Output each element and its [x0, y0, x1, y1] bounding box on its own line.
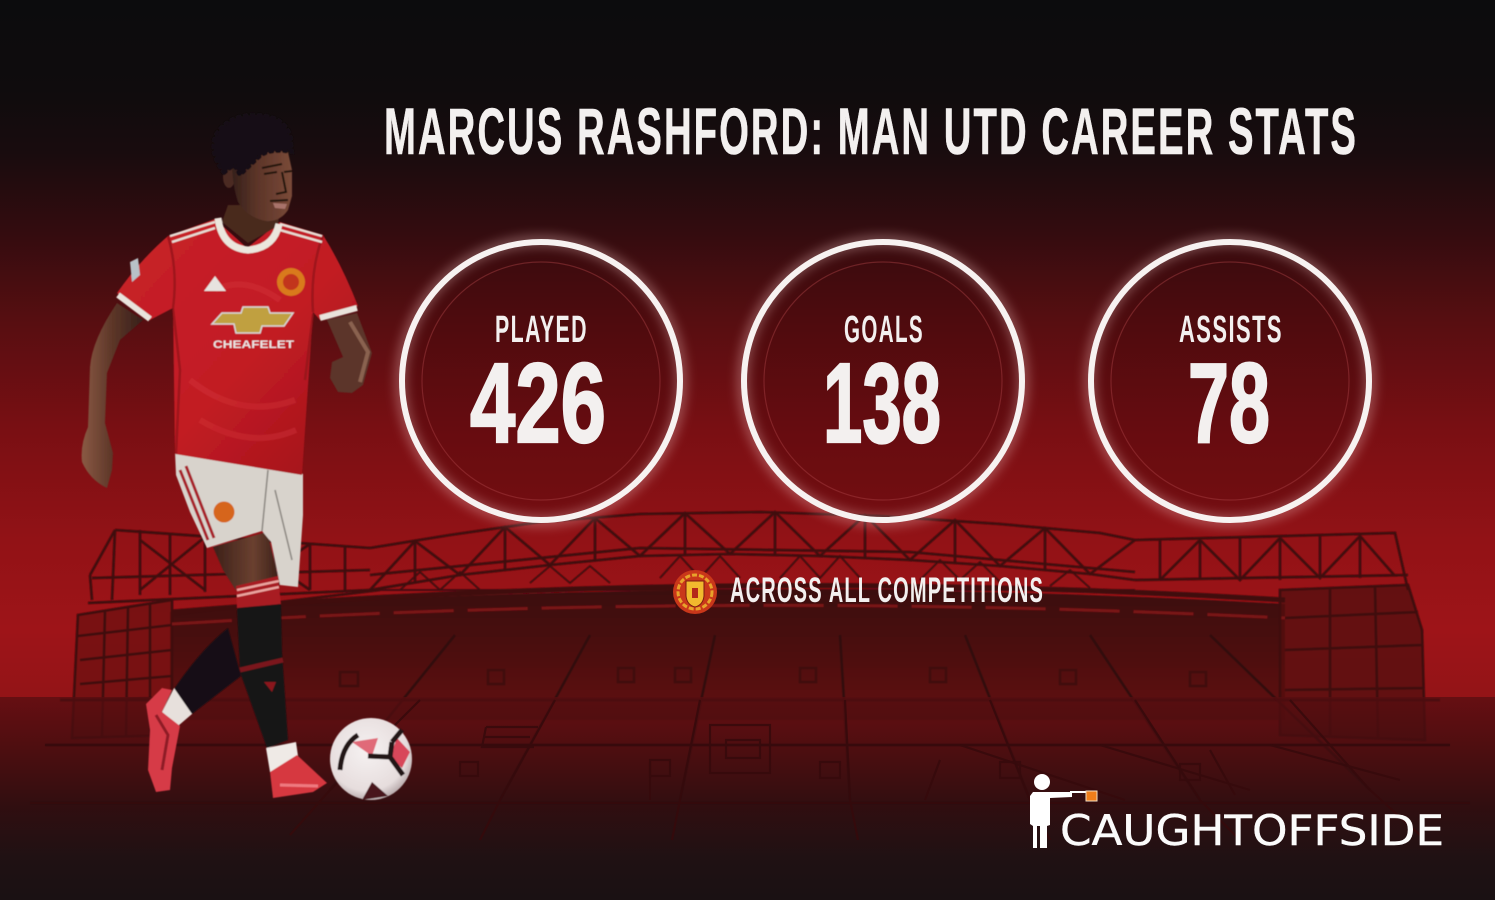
right roof truss — [1135, 533, 1408, 590]
collar — [218, 218, 279, 250]
front boot — [270, 755, 327, 798]
seating rows — [30, 700, 1470, 803]
club crest badge — [673, 570, 717, 614]
left corner tower — [72, 590, 380, 738]
face — [232, 150, 292, 221]
faint lines over floor — [30, 700, 1470, 840]
label: played: PLAYED — [495, 309, 588, 351]
front sock band — [236, 576, 281, 610]
ear — [223, 166, 235, 188]
wordmark: CAUGHTOFFSIDE — [1060, 806, 1444, 855]
premier league sleeve badge — [130, 258, 140, 282]
back leg — [172, 628, 241, 714]
left roof truss — [88, 530, 370, 603]
player illustration — [82, 115, 372, 798]
sponsor chevrolet bowtie — [212, 307, 293, 333]
label: goals: GOALS — [844, 309, 924, 351]
hair — [213, 115, 292, 175]
value: 78: 78 — [1188, 340, 1270, 466]
left arm — [82, 303, 143, 488]
neck — [222, 205, 280, 243]
badge: adidas logo — [204, 276, 226, 291]
right tower body — [1280, 585, 1425, 740]
front ankle sock — [266, 742, 298, 775]
lower truss lattice — [370, 556, 1135, 590]
football — [330, 718, 412, 800]
referee icon — [1030, 774, 1090, 848]
value: 426: 426 — [470, 340, 606, 466]
sponsor text: CHEAFELET — [213, 339, 294, 351]
sleeve cuffs — [118, 295, 357, 319]
facial features — [262, 164, 292, 201]
right arm — [327, 313, 372, 393]
roof fascia — [172, 586, 1285, 612]
shorts — [175, 452, 303, 587]
shorts crest — [214, 502, 234, 522]
right corner tower — [1280, 585, 1425, 740]
dark floor band — [0, 697, 1495, 900]
stat circle: goals — [743, 241, 1023, 521]
caption: ACROSS ALL COMPETITIONS — [730, 571, 1044, 610]
stadium bowl shadow — [170, 590, 1285, 720]
shirt — [117, 219, 358, 475]
thigh — [213, 532, 280, 592]
stadium line drawing — [30, 512, 1470, 803]
label: assists: ASSISTS — [1179, 309, 1283, 351]
back boot — [146, 688, 180, 792]
front sock — [237, 604, 288, 748]
main roof truss — [370, 512, 1135, 590]
stat circle: played — [401, 241, 681, 521]
aisles and seating blocks — [330, 635, 1370, 800]
shirt crest — [277, 268, 305, 296]
left tower body — [72, 600, 172, 738]
caughtoffside logo — [1030, 774, 1444, 855]
referee flag — [1086, 791, 1097, 801]
back ankle sock — [162, 688, 192, 726]
value: 138: 138 — [823, 340, 941, 466]
stat circle: assists — [1090, 241, 1370, 521]
